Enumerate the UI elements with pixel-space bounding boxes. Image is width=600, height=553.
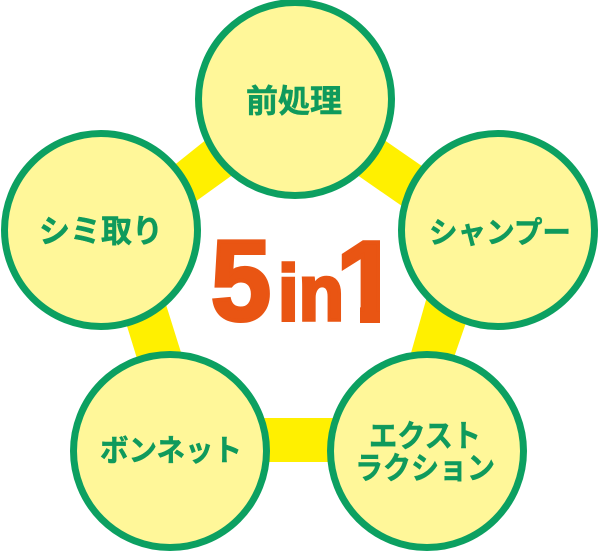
yellow pentagon connectors	[122, 135, 468, 462]
circle: shampoo	[402, 134, 594, 326]
circle: stain removal: シミ取り	[39, 213, 163, 249]
circle: extraction: エクスト	[369, 419, 481, 454]
center title: 5in1	[212, 239, 380, 323]
center title: 5in1: in	[278, 248, 344, 337]
center title: 5in1: 1	[336, 219, 399, 346]
circle: bonnet	[74, 354, 266, 548]
circle: extraction	[330, 354, 524, 548]
circle: extraction: ラクション	[355, 451, 495, 486]
circle: shampoo: シャンプー	[429, 217, 571, 250]
circle: pre-treatment: 前処理	[246, 83, 342, 119]
circle: bonnet: ボンネット	[100, 435, 242, 468]
circle: pre-treatment	[198, 2, 392, 196]
circle: stain removal	[4, 134, 198, 326]
center title: 5in1: 5	[211, 218, 271, 345]
